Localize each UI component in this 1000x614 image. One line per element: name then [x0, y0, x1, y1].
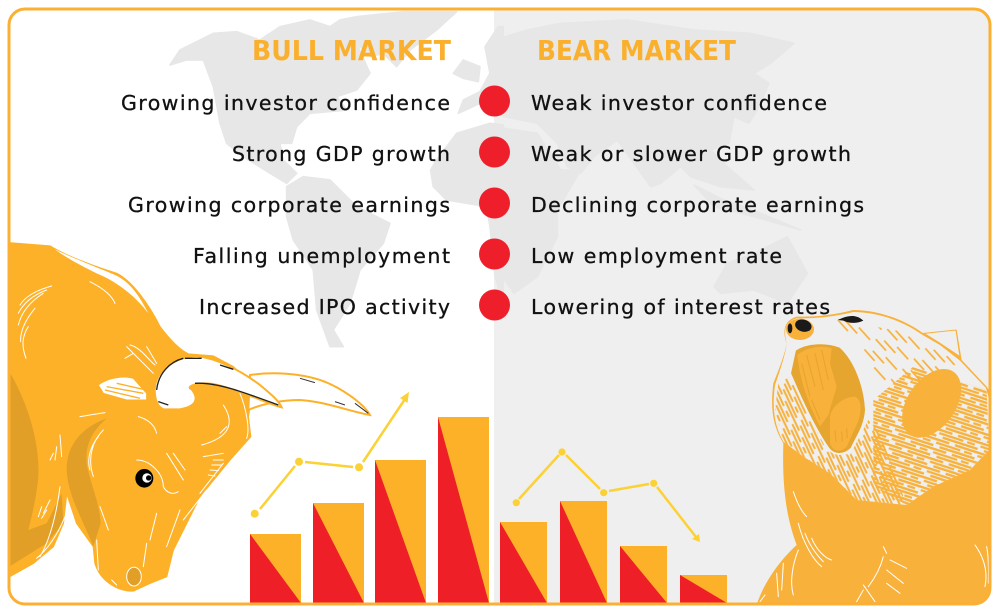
bear ear: [924, 330, 960, 357]
bear market list: [531, 91, 864, 319]
bear body fur lines: [760, 492, 988, 602]
panel: bear market background: [494, 9, 990, 604]
red bullet dots: [479, 86, 510, 320]
bear fur: head: [837, 320, 960, 387]
bar chart: [250, 417, 727, 603]
bear bars: [500, 501, 727, 603]
bear nostrils: [788, 320, 812, 334]
bear market list: Weak investor confidence: [531, 91, 827, 115]
bull ear hatch: [105, 383, 143, 398]
bear market list: Low employment rate: [531, 244, 782, 268]
bear teeth: [802, 350, 847, 442]
bear silhouette: [757, 310, 993, 605]
bull eye: [135, 469, 153, 488]
falling trend line with arrow: [513, 448, 700, 542]
bull market list: Growing corporate earnings: [128, 193, 450, 217]
bull market list: Growing investor confidence: [121, 91, 450, 115]
bear fur: neck: [873, 367, 989, 505]
bull nostril: [127, 567, 141, 586]
bear tongue: [830, 397, 861, 451]
bull market list: Falling unemployment: [193, 244, 450, 268]
bull body: [7, 243, 253, 591]
heading: bear market: BEAR MARKET: [537, 35, 736, 67]
bull ear: [98, 377, 147, 400]
bear market list: Declining corporate earnings: [531, 193, 864, 217]
bull market list: Strong GDP growth: [232, 142, 450, 166]
bull back highlight: [55, 249, 148, 313]
rising trend line with arrow: [251, 392, 409, 518]
bear shoulder fur mass: [902, 369, 962, 438]
bull front horn detail: [157, 358, 278, 405]
bull rear horn detail: [300, 378, 368, 413]
bull bars: [250, 417, 489, 603]
bull neck shadow: [67, 418, 107, 547]
bear illustration: [757, 310, 993, 605]
bull market list: [121, 91, 450, 319]
bull shading: [9, 372, 63, 567]
bear muzzle: [786, 319, 814, 340]
bear upper palate: [797, 347, 837, 427]
heading: bull market: BULL MARKET: [252, 35, 451, 67]
bear face and neck fur patch: [774, 312, 989, 505]
bull illustration: [7, 243, 370, 591]
bear market list: Weak or slower GDP growth: [531, 142, 851, 166]
bear eye: [838, 316, 863, 323]
bull rear horn: [248, 373, 370, 415]
bear fur: throat: [775, 377, 907, 505]
bull front horn: [155, 356, 282, 409]
world map: [170, 12, 807, 347]
bear mouth: [790, 343, 866, 454]
bull fur lines: [18, 282, 248, 585]
bear market list: Lowering of interest rates: [531, 295, 830, 319]
bull market list: Increased IPO activity: [199, 295, 450, 319]
